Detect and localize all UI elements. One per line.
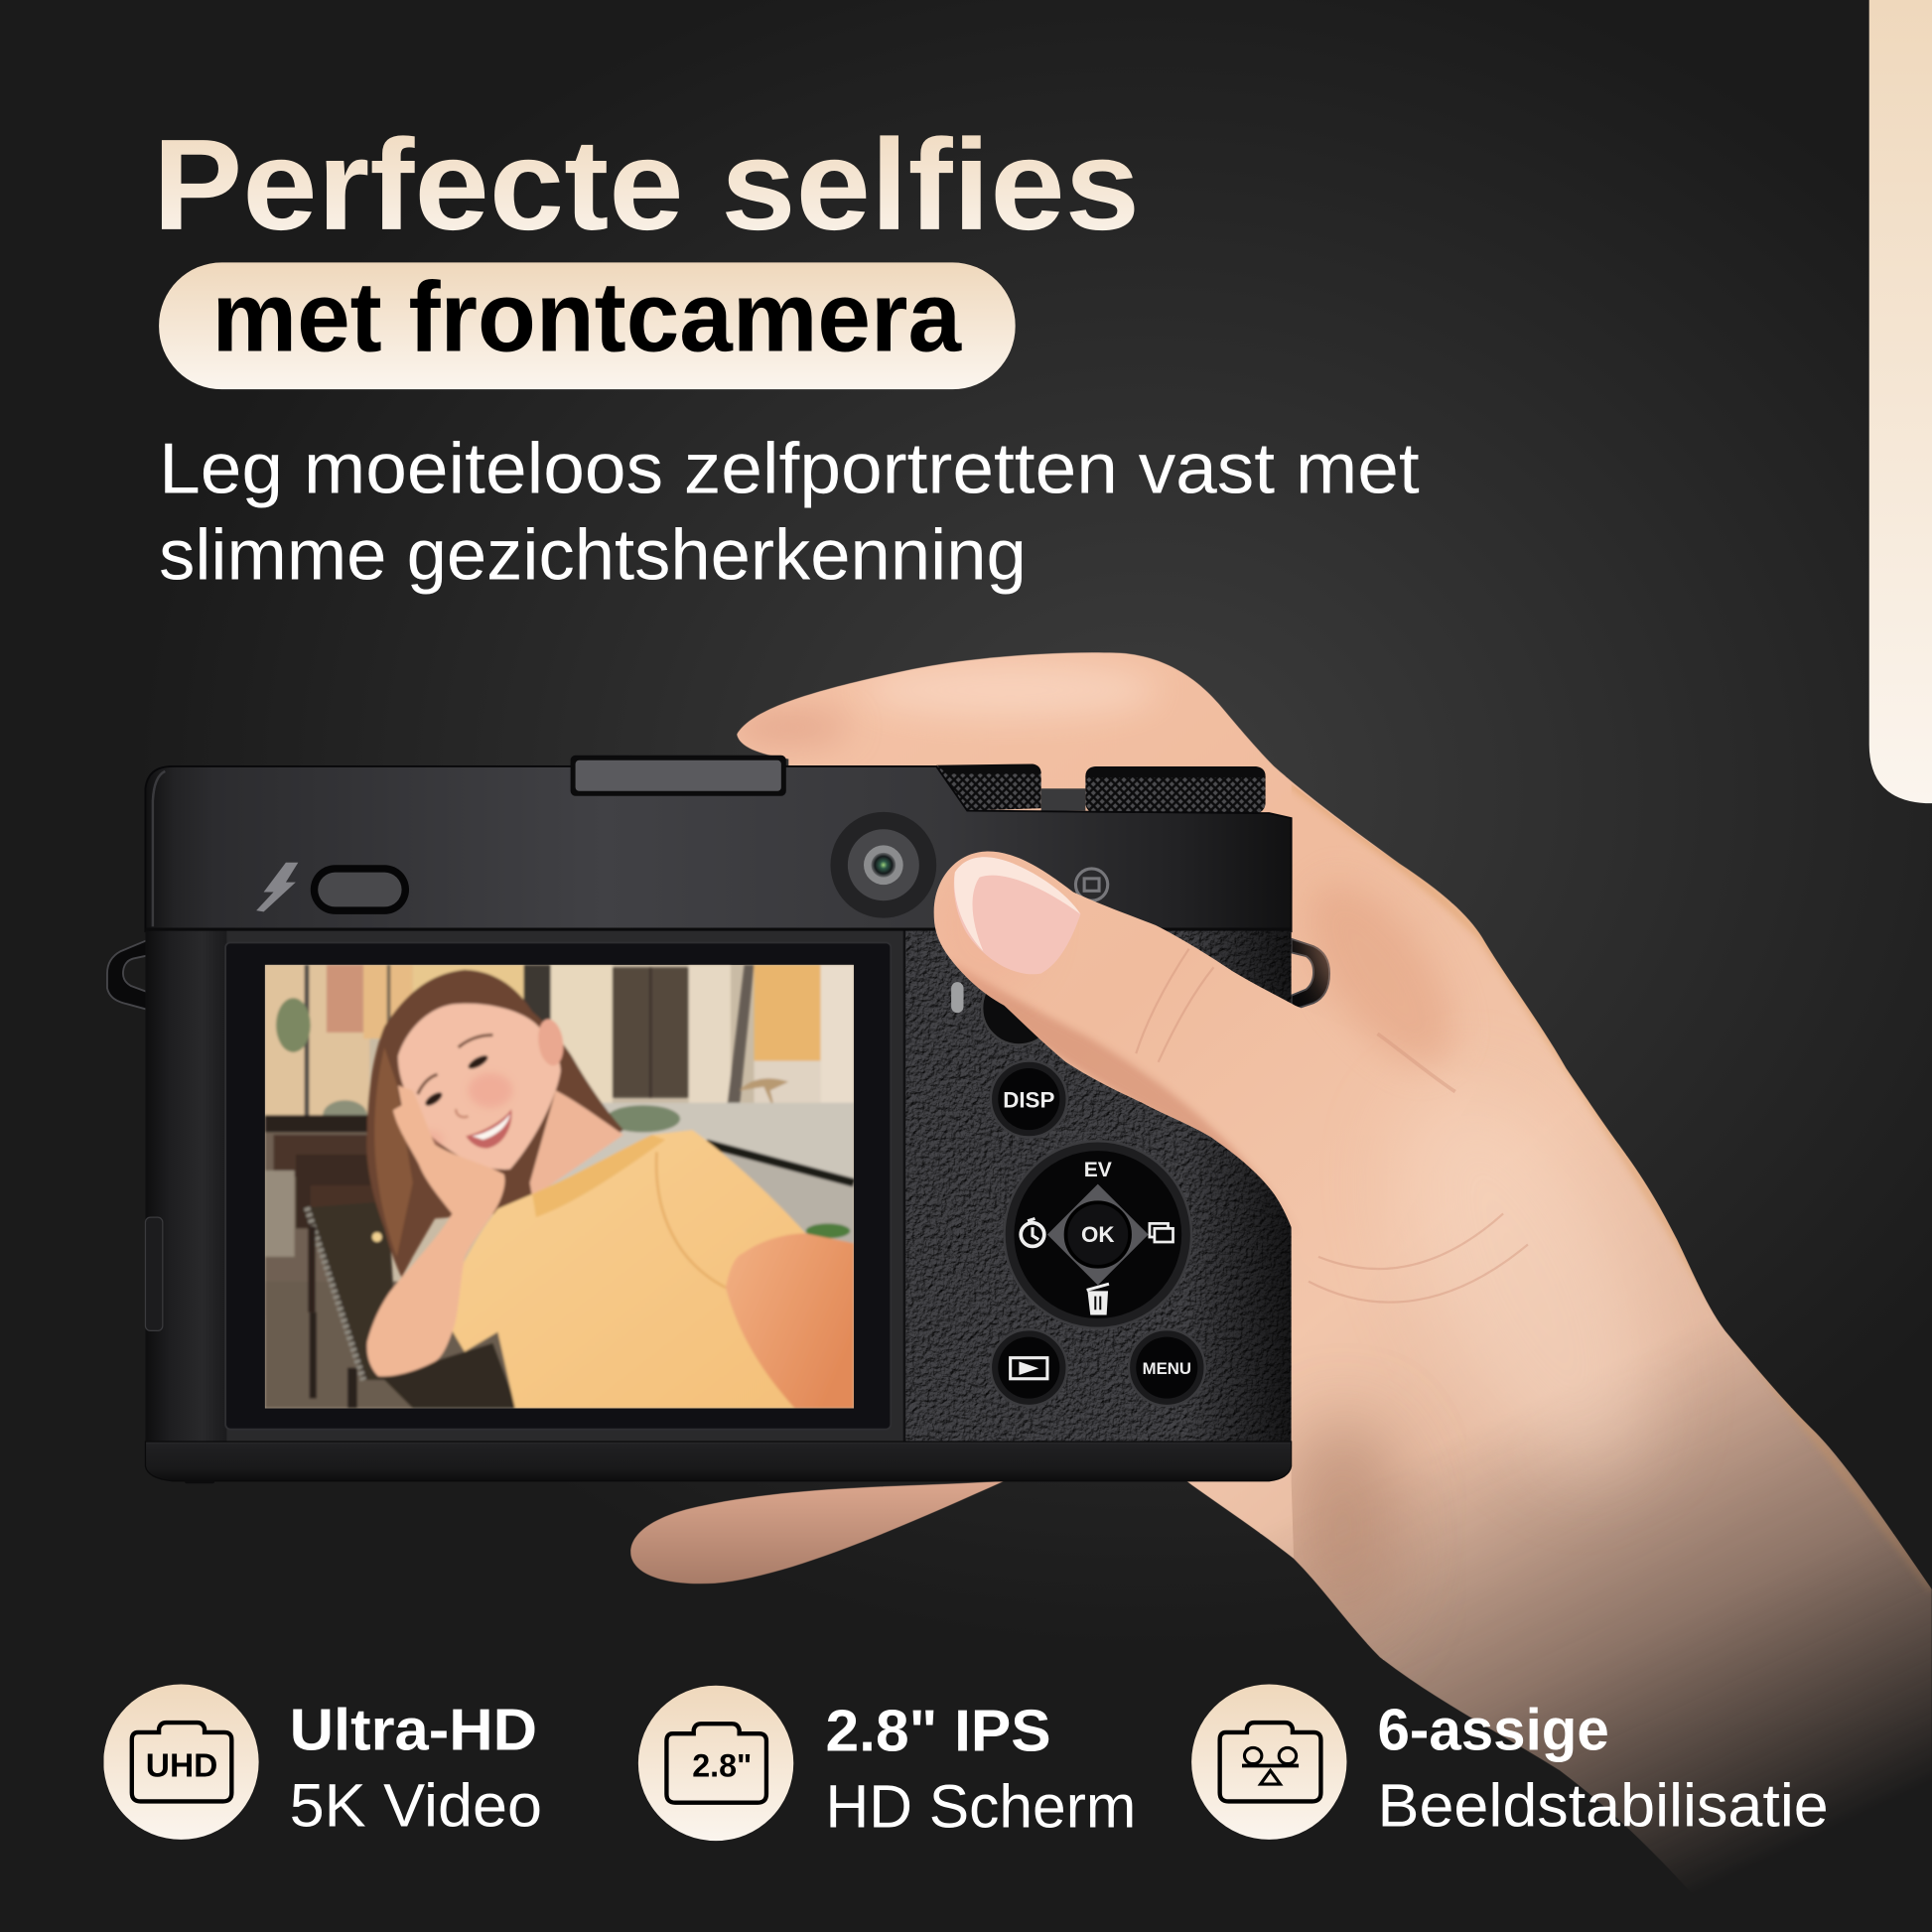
feature: stabilisation: Beeldstabilisatie: [1378, 1771, 1829, 1839]
mode icon on top plate: [1075, 869, 1108, 900]
nose: [456, 1109, 469, 1117]
panel: cropped side card: [1869, 0, 1932, 803]
feature: Ultra-HD: [103, 1685, 542, 1840]
description text: Leg moeiteloos zelfportretten vast met: [159, 429, 1420, 508]
pill heading: met frontcamera: [211, 262, 962, 373]
gap between dials: [1041, 788, 1085, 811]
icon: self-timer: [1021, 1218, 1044, 1246]
hair: [366, 970, 623, 1278]
icon: UHD camera: UHD: [146, 1748, 217, 1785]
foreground arm: [726, 1233, 854, 1409]
icon: trash: [1087, 1284, 1109, 1313]
front lens: [830, 812, 936, 918]
LED: [951, 982, 964, 1013]
DISP button: DISP: [1003, 1088, 1054, 1113]
smile: [466, 1109, 511, 1149]
side port door: [145, 1217, 163, 1330]
icon: UHD camera: [132, 1723, 231, 1801]
thumb base: [934, 852, 1478, 1307]
lower finger: [630, 1481, 1004, 1584]
scene: cafe tables and chairs: [265, 1115, 530, 1409]
grip divider: [903, 930, 905, 1442]
title: Perfecte selfies: [153, 112, 1140, 257]
camera: [107, 756, 1329, 1483]
left grip and lower body: [145, 930, 909, 1443]
d-pad: [1004, 1141, 1191, 1328]
selfie photo on screen: [265, 965, 854, 1409]
strap lug left: [107, 939, 150, 1011]
bottom strip: [145, 1442, 1292, 1481]
play button: [991, 1329, 1067, 1406]
DISP button: [991, 1061, 1067, 1138]
screen bezel: [225, 942, 891, 1430]
dial left: [936, 763, 1041, 811]
leather grip: [905, 930, 1292, 1442]
feature: 2.8 inch screen: [638, 1686, 1136, 1841]
feature: Ultra-HD: 5K Video: [290, 1771, 542, 1839]
description text: slimme gezichtsherkenning: [159, 515, 1027, 595]
eyes and brows: [418, 1035, 492, 1108]
scene: background street: [265, 965, 854, 1244]
raised hand and arm: [367, 1085, 504, 1376]
neck: [530, 1090, 623, 1197]
flash icon: [256, 863, 298, 911]
camera feet: [185, 1480, 214, 1483]
top plate divider: [145, 928, 1292, 931]
thumb and front of hand: [926, 783, 1932, 1639]
icon: balance camera: [1220, 1723, 1320, 1801]
feature: 2.8 inch screen: 2.8" IPS: [826, 1698, 1051, 1764]
left body highlight: [153, 771, 165, 926]
strap lug right: [1292, 939, 1329, 1011]
description text: [159, 429, 1420, 595]
top plate: [145, 766, 1292, 931]
menu button: [1129, 1329, 1205, 1406]
feature: stabilisation: [1191, 1685, 1829, 1840]
face: [398, 1004, 561, 1170]
feature: 2.8 inch screen: HD Scherm: [826, 1773, 1136, 1841]
feature: stabilisation: 6-assige: [1378, 1696, 1609, 1762]
knuckle creases: [1136, 949, 1528, 1303]
flash button: [311, 865, 409, 914]
shirt: [441, 1130, 806, 1409]
hot shoe: [571, 756, 786, 796]
dial right: [1085, 766, 1266, 813]
hand shading: [926, 783, 1932, 1639]
hand behind camera: [630, 640, 1932, 1932]
d-pad: OK: [1081, 1222, 1115, 1247]
thumbnail: [954, 857, 1080, 974]
icon: burst mode: [1150, 1223, 1173, 1242]
icon: screen size camera: 2.8": [692, 1748, 752, 1784]
ear: [538, 1017, 566, 1066]
hidden button: [982, 971, 1056, 1044]
menu button: MENU: [1143, 1359, 1191, 1378]
d-pad: EV: [1084, 1159, 1112, 1181]
palm and upper finger: [727, 640, 1932, 1932]
icon: screen size camera: [666, 1724, 766, 1803]
feature: Ultra-HD: Ultra-HD: [290, 1696, 537, 1762]
